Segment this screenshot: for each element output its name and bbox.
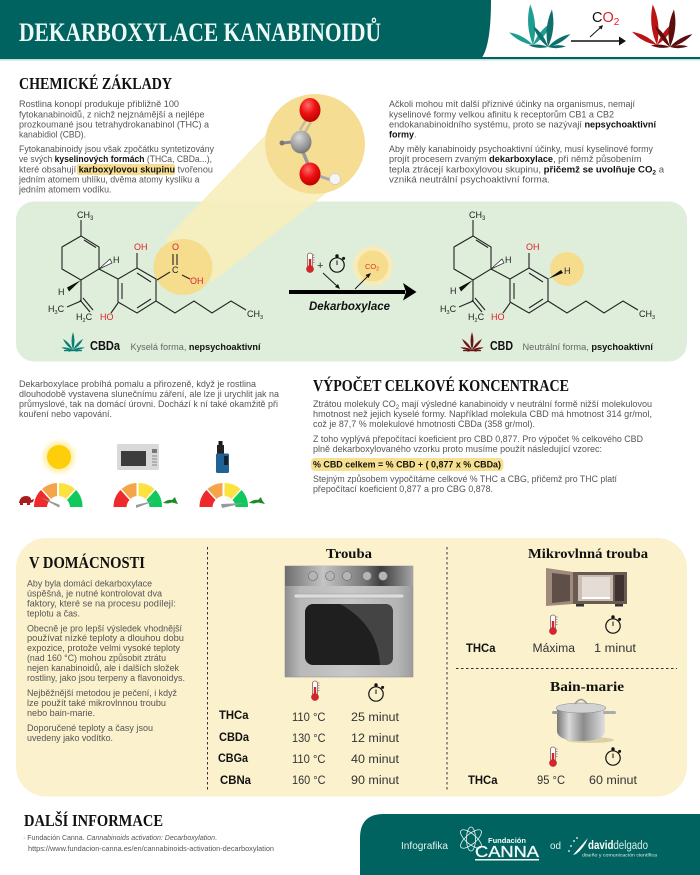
molecule: CBD: CH <box>639 309 652 319</box>
row: bain-marie values <box>468 775 638 787</box>
row: bain-marie values: THCa <box>468 775 498 787</box>
text block: total concentration: Stejným způsobem vypočítáme celkové % THC a CBG, přičemž pro THC platí <box>313 474 617 485</box>
text block: total concentration <box>311 399 652 495</box>
text block: decarboxylation intro: průmyslové, tak na domácí úrovni. Dochází k ní také okamžitě při <box>19 399 278 410</box>
text block: total concentration: mají výsledné kanabinoidy v neutrální formě nižší molekulovou <box>399 399 652 410</box>
panel: credits footer: od <box>550 841 561 852</box>
logo: David Delgado <box>568 837 657 858</box>
text block: at home: Doporučené teploty a časy jsou <box>27 723 153 734</box>
molecule: CBD: 3 <box>482 216 486 222</box>
molecule: CBDa: H <box>58 287 64 297</box>
row: microwave values: 1 minut <box>594 643 637 655</box>
heading: microwave: Mikrovlnná trouba <box>528 547 648 562</box>
text block: total concentration: Ztrátou molekuly CO <box>313 399 401 410</box>
molecule: CBD: H <box>564 266 570 276</box>
molecule: CBD: 3 <box>446 310 450 316</box>
molecule: carboxyl 3D model <box>265 94 365 194</box>
label: CBD: CBD <box>490 339 513 353</box>
text block: chemical basics left: Fytokanabinoidy jsou však zpočátku syntetizovány <box>19 144 214 155</box>
icon: vape <box>216 441 229 473</box>
reaction conditions and arrow: 2 <box>376 266 379 272</box>
logo: Fundación Canna <box>458 827 540 861</box>
text block: chemical basics left: které obsahují karboxylovou skupinu tvořenou <box>19 164 213 176</box>
text block: chemical basics left: ve svých kyselinových formách (THCa, CBDa...), <box>19 154 212 165</box>
text block: total concentration: 2 <box>396 404 400 411</box>
text block: total concentration: Z toho vyplývá přepočítací koeficient pro CBD 0,877. Pro výpočet % celkového CBD <box>313 434 643 445</box>
text block: decarboxylation intro: kouření nebo vapování. <box>19 409 112 420</box>
icon: microwave white <box>117 444 159 470</box>
text block: at home: teplotu a čas. <box>27 608 80 620</box>
text block: total concentration: plně dekarboxylovaného vzorku proto musíme použít následující vzorec: <box>313 444 602 455</box>
label: CBDa: Kyselá forma, nepsychoaktivní <box>130 342 261 352</box>
molecule: CBDa <box>48 210 263 324</box>
molecule: CBD: H <box>505 255 512 265</box>
table: oven times: THCa <box>219 710 249 722</box>
molecule: CBDa: C <box>86 312 93 322</box>
header band <box>0 0 700 60</box>
icon: sun <box>40 438 78 476</box>
label: CBDa: CBDa <box>90 339 121 353</box>
text block: at home: Obecně je pro lepší výsledek vhodnější <box>27 624 182 634</box>
table: oven times: 160 °C <box>292 775 326 787</box>
icon: CO2 reaction arrow <box>571 10 626 46</box>
molecule: CBDa: HO <box>100 312 114 322</box>
title: DEKARBOXYLACE KANABINOIDŮ <box>19 16 381 47</box>
molecule: CBD: CH <box>469 210 482 220</box>
text block: decarboxylation intro: Dekarboxylace probíhá pomalu a přirozeně, když je rostlina <box>19 379 257 390</box>
table: oven times: 90 minut <box>351 775 400 787</box>
molecule: CBDa: CH <box>247 309 260 319</box>
text block: chemical basics left: jedním atomem vodíku. <box>18 184 112 196</box>
text block: chemical basics right: tepla ztrácejí karboxylovou skupinu, přičemž se uvolňuje CO <box>389 164 652 176</box>
text block: total concentration: hmotnost než jejich kyselé formy. Například molekula CBD má hmotnost 314 gr/mol, <box>313 409 652 420</box>
text block: references: · Fundación Canna. Cannabinoids activation: Decarboxylation. <box>23 833 217 842</box>
molecule: CBDa: CH <box>77 210 90 220</box>
text block: at home: uvedeny jako vodítko. <box>27 733 113 744</box>
table: oven times <box>218 710 400 787</box>
text block: at home <box>27 578 185 744</box>
heading: total concentration: VÝPOČET CELKOVÉ KONCENTRACE <box>313 376 569 395</box>
icon: CO2 reaction arrow: 2 <box>614 17 620 28</box>
molecule: CBD: 2 <box>474 318 478 324</box>
molecule: CBDa: C <box>58 304 65 314</box>
molecule: CBD: H <box>440 304 446 314</box>
text block: at home: nejen kanabinoidů, ale i dalších složek <box>27 663 179 674</box>
text block: references <box>23 833 274 853</box>
reaction conditions and arrow: + <box>317 260 323 272</box>
molecule: CBD <box>440 210 655 324</box>
molecule: CBDa: 3 <box>260 315 263 321</box>
text block: chemical basics left: kanabidiol (CBD). <box>19 130 86 140</box>
molecule: CBDa: C <box>172 265 179 275</box>
molecule: CBDa: H <box>48 304 54 314</box>
table: oven times: 130 °C <box>292 733 326 745</box>
reaction conditions and arrow <box>289 253 416 313</box>
text block: chemical basics left: prozkoumané jsou tetrahydrokanabinol (THC) a <box>19 120 210 130</box>
heading: oven: Trouba <box>326 547 372 562</box>
icon: bain-marie timer <box>606 747 621 765</box>
text block: chemical basics right: formy. <box>389 130 416 140</box>
icon: bain-marie thermometer <box>549 747 558 767</box>
panel: at home <box>16 538 687 796</box>
text block: chemical basics right: Aby měly kanabinoidy psychoaktivní účinky, musí kyselinové formy <box>389 144 653 155</box>
molecule: CBDa: H <box>113 255 120 265</box>
CO2 release highlight <box>353 246 393 286</box>
row: microwave values <box>466 643 637 655</box>
label: CBD <box>460 332 654 353</box>
text block: at home: úspěšná, je nutné kontrolovat dva <box>27 588 163 600</box>
CBDa carboxyl highlight <box>154 239 212 295</box>
text block: chemical basics right: endokanabinoidního systému, proto se nazývají nepsychoaktivní <box>389 120 656 130</box>
text block: chemical basics left: jedním atomem uhlíku, dvěma atomy kyslíku a <box>18 174 200 186</box>
icon: pot <box>552 700 616 743</box>
table: oven times: 110 °C <box>292 754 326 766</box>
text block: chemical basics left <box>18 99 214 196</box>
icon: hare <box>163 497 178 504</box>
icon: oven timer <box>369 683 384 701</box>
label: CBDa <box>61 332 261 353</box>
text block: at home: nebo bain-marie. <box>27 708 95 719</box>
table: oven times: CBDa <box>219 732 250 744</box>
gauge: microwave fast <box>113 483 178 508</box>
icon: microwave thermometer <box>549 615 558 635</box>
molecule: CBD: H <box>468 312 474 322</box>
text block: chemical basics right: vzniká neutrální psychoaktivní forma. <box>389 174 550 186</box>
molecule: CBDa: OH <box>190 276 204 286</box>
reaction conditions and arrow: CO <box>365 262 376 271</box>
molecule: CBD: OH <box>526 242 540 252</box>
gauge: sun slow <box>19 483 83 508</box>
logo: Fundación Canna: CANNA <box>475 844 540 861</box>
table: oven times: 25 minut <box>351 712 400 724</box>
text block: at home: používat nízké teploty a dlouhou dobu <box>27 633 184 644</box>
molecule: CBDa: O <box>172 242 179 252</box>
row: microwave values: Máxima <box>532 643 576 655</box>
icon: CO2 reaction arrow: CO <box>592 10 614 26</box>
icon: microwave open <box>546 568 627 606</box>
text block: chemical basics right: kyselinové formy velkou afinitu k receptorům CB1 a CB2 <box>389 110 614 120</box>
icon: turtle <box>19 496 34 505</box>
molecule: CBDa: H <box>76 312 82 322</box>
text block: at home: Aby byla domácí dekarboxylace <box>27 578 152 590</box>
molecule: CBD: C <box>478 312 485 322</box>
text block: chemical basics right: Ačkoli mohou mít další příznivé účinky na organismus, nemají <box>389 99 635 110</box>
icon: hare <box>249 497 265 504</box>
panel: green reaction panel <box>16 128 687 362</box>
icon: red cannabis leaves <box>631 4 693 49</box>
text block: chemical basics right: 2 <box>652 170 656 176</box>
label: CBD: Neutrální forma, psychoaktivní <box>522 342 654 352</box>
text block: decarboxylation intro: dlouhodobě vystavena slunečnímu záření, ale lze ji urychlit jak na <box>19 389 280 400</box>
text block: total concentration: přepočítací koeficient 0,877 a pro CBG 0,878. <box>313 484 493 495</box>
logo: Fundación Canna: Fundación <box>488 836 526 845</box>
heading: at home: V DOMÁCNOSTI <box>29 553 145 572</box>
molecule: CBDa: 3 <box>54 310 58 316</box>
table: oven times: CBGa <box>218 753 249 765</box>
icon: teal cannabis leaves <box>508 4 571 49</box>
row: bain-marie values: 60 minut <box>589 775 638 787</box>
molecule: CBDa: 2 <box>82 318 86 324</box>
molecule: CBDa: OH <box>134 242 148 252</box>
text block: at home: expozice, protože velmi vysoké teploty <box>27 643 180 654</box>
heading: bain-marie: Bain-marie <box>550 680 624 695</box>
text block: chemical basics right <box>389 99 665 186</box>
table: oven times: 40 minut <box>351 754 400 766</box>
text block: at home: rostliny, jako jsou terpeny a flavonoidys. <box>27 673 185 684</box>
text block: at home: faktory, které se na procesu podílejí: <box>27 598 176 610</box>
table: oven times: 12 minut <box>351 733 400 745</box>
text block: at home: lze použít také mikrovlnnou troubu <box>27 698 166 709</box>
row: microwave values: THCa <box>466 643 496 655</box>
text block: at home: (nad 160 °C) mohou způsobit ztrátu <box>27 653 166 664</box>
gauge: vape fastest <box>199 483 265 508</box>
formula highlight: % CBD celkem = % CBD + ( 0,877 x % CBDa) <box>313 460 501 470</box>
molecule: CBD: H <box>450 286 456 296</box>
heading: further information: DALŠÍ INFORMACE <box>24 811 163 830</box>
row: bain-marie values: 95 °C <box>537 775 565 787</box>
logo: David Delgado: daviddelgado <box>588 840 648 852</box>
molecule: CBD: C <box>450 304 457 314</box>
text block: total concentration: což je 87,7 % molekulové hmotnosti CBDa (358 gr/mol). <box>313 419 535 430</box>
panel: credits footer <box>360 814 700 875</box>
molecule: CBD: 3 <box>652 315 655 321</box>
text block: decarboxylation intro <box>19 379 280 420</box>
heading: chemical basics: CHEMICKÉ ZÁKLADY <box>19 74 172 93</box>
molecule: CBDa: 3 <box>90 216 94 222</box>
CBD hydrogen highlight <box>550 252 584 286</box>
panel: credits footer: Infografika <box>401 841 448 852</box>
text block: references: https://www.fundacion-canna.es/en/cannabinoids-activation-decarboxylation <box>28 844 274 853</box>
icon: oven <box>285 566 413 677</box>
table: oven times: 110 °C <box>292 712 326 724</box>
text block: chemical basics left: fytokanabinoidů, z nichž nejznámější a nejlépe <box>19 110 204 120</box>
icon: oven thermometer <box>311 681 320 701</box>
highlight beam from carboxyl group <box>165 128 346 282</box>
text block: chemical basics right: projít procesem zvaným dekarboxylace, při němž působením <box>389 154 642 165</box>
logo: David Delgado: diseño y comunicación científica <box>582 852 657 858</box>
table: oven times: CBNa <box>220 775 252 787</box>
text block: at home: Nejběžnější metodou je pečení, i když <box>27 688 177 699</box>
text block: chemical basics right: a <box>656 164 665 176</box>
reaction conditions and arrow: Dekarboxylace <box>309 301 391 313</box>
icon: microwave timer <box>606 615 621 633</box>
text block: chemical basics left: Rostlina konopí produkuje přibližně 100 <box>19 99 179 110</box>
molecule: CBD: HO <box>491 312 504 322</box>
